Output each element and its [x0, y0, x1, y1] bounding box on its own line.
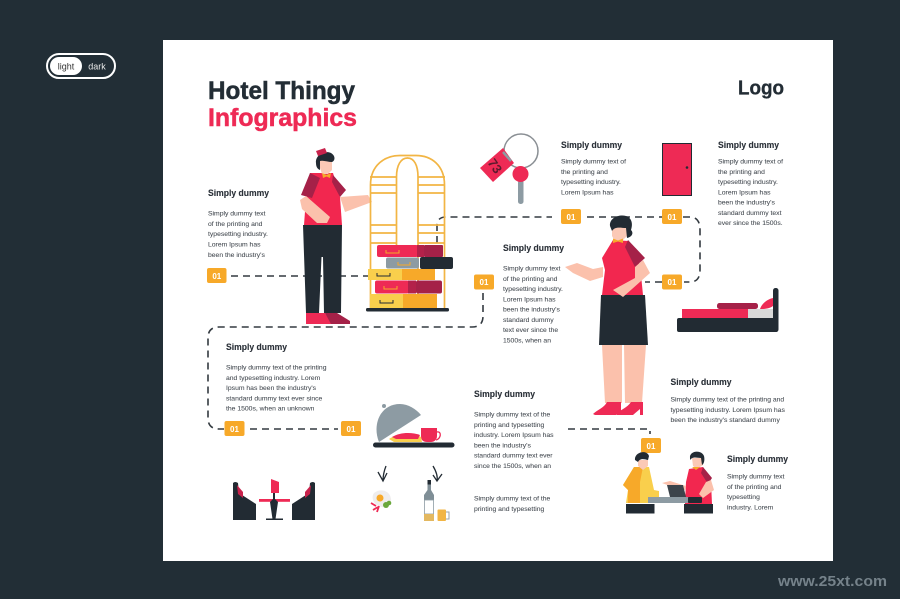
logo: Logo — [738, 78, 784, 100]
badge: bed — [662, 274, 682, 290]
text block: waitress — [503, 243, 565, 344]
badge: reception — [641, 438, 661, 453]
text block: restaurant: Simply dummy text of the printing — [226, 364, 327, 372]
text block: food service: printing and typesetting — [474, 422, 545, 429]
icon: bed — [677, 288, 778, 332]
folded arm — [300, 196, 330, 223]
guest body — [623, 467, 659, 503]
text block: waitress: 1500s, when an — [503, 338, 551, 344]
text block: key: the printing and — [561, 169, 608, 176]
text block: waitress: of the printing and — [503, 276, 558, 283]
bow tie — [613, 238, 623, 243]
dashed connector: reception — [568, 429, 650, 434]
text block: right middle: Simply dummy — [670, 377, 732, 388]
cart frame — [370, 156, 445, 308]
text block: bellboy: of the printing and — [208, 221, 263, 228]
text block: door: ever since the 1500s. — [718, 220, 783, 227]
text block: reception: typesetting — [727, 494, 760, 501]
badge: bellboy — [207, 268, 226, 283]
text block: waitress: text ever since the — [503, 327, 558, 334]
illustration: luggage cart — [366, 156, 453, 312]
text block: door: Simply dummy text of — [718, 158, 783, 166]
text block: food service: printing and typesetting — [474, 506, 545, 513]
theme toggle: dark — [88, 62, 106, 72]
text block: bellboy: typesetting industry. — [208, 231, 268, 238]
sleeve — [625, 240, 645, 267]
badge: restaurant right — [341, 421, 361, 436]
theme toggle: light — [58, 62, 75, 72]
text block: reception: industry. Lorem — [727, 504, 774, 512]
text block: waitress: Lorem Ipsum has — [503, 296, 556, 304]
title: Hotel Thingy — [208, 77, 355, 105]
text block: waitress: standard dummy — [503, 317, 554, 324]
badge: restaurant left: 01 — [230, 425, 239, 434]
text block: right middle — [670, 377, 785, 424]
shirt — [304, 173, 342, 225]
face — [612, 224, 627, 241]
hair — [316, 152, 334, 170]
arrow: to food — [378, 466, 387, 481]
badge: restaurant right: 01 — [347, 425, 356, 434]
text block: reception: Simply dummy text — [727, 474, 785, 480]
hair — [610, 215, 632, 238]
text block: door: been the industry's — [718, 200, 775, 206]
icon: serving tray with cloche — [373, 404, 454, 448]
forearm — [613, 260, 650, 297]
dashed connector: top route — [437, 217, 700, 282]
badge: door: 01 — [668, 213, 677, 222]
text block: waitress: Simply dummy — [503, 243, 565, 254]
pointing arm — [565, 263, 603, 281]
arrow: to drinks — [433, 466, 442, 481]
text block: bellboy — [208, 188, 270, 259]
text block: key — [561, 140, 626, 196]
text block: food service: Simply dummy text of the — [474, 412, 551, 418]
sleeves — [301, 173, 346, 198]
face — [320, 160, 332, 174]
text block: food service: standard dummy text ever — [474, 452, 553, 460]
text block: door: standard dummy text — [718, 210, 782, 217]
badge: bellboy: 01 — [212, 272, 222, 281]
text block: food service: Simply dummy — [474, 389, 536, 400]
text block: food service: been the industry's — [474, 442, 531, 450]
text block: key: Lorem Ipsum has — [561, 190, 614, 196]
text block: reception — [727, 454, 789, 512]
text block: right middle: Simply dummy text of the printing and — [670, 396, 784, 404]
badge: waitress: 01 — [480, 278, 489, 287]
text block: restaurant: standard dummy text ever since — [226, 396, 323, 402]
text block: key: Simply dummy — [561, 140, 623, 151]
badge: bed: 01 — [668, 278, 677, 287]
text block: door: Lorem Ipsum has — [718, 190, 771, 196]
watermark: www.25xt.com — [777, 574, 887, 590]
title: Infographics — [208, 104, 357, 132]
bow tie — [322, 173, 331, 178]
right arm — [340, 195, 372, 212]
text block: waitress: Simply dummy text — [503, 266, 561, 272]
badge: door — [662, 209, 682, 224]
luggage stack — [377, 245, 418, 257]
text block: bellboy: Simply dummy — [208, 188, 270, 199]
text block: door: typesetting industry. — [718, 179, 778, 186]
badge: restaurant left — [224, 421, 244, 436]
text block: waitress: been the industry's — [503, 306, 560, 314]
dashed connector: bellboy — [231, 275, 368, 277]
text block: restaurant: Simply dummy — [226, 342, 288, 353]
theme toggle — [47, 54, 115, 78]
text block: door: the printing and — [718, 169, 765, 176]
white card panel — [163, 40, 833, 561]
icon: key with tag — [480, 134, 538, 204]
counter — [648, 497, 688, 503]
text block: food service: industry. Lorem Ipsum has — [474, 432, 554, 439]
illustration: bellboy — [300, 148, 372, 324]
shoes — [306, 313, 331, 324]
illustration: reception desk — [623, 452, 714, 514]
text block: reception: of the printing and — [727, 484, 782, 491]
text block: bellboy: Lorem Ipsum has — [208, 242, 261, 248]
receptionist body — [685, 467, 712, 504]
title — [208, 77, 357, 132]
skirt — [599, 295, 648, 345]
text block: key: Simply dummy text of — [561, 158, 626, 166]
text block: right middle: been the industry's standard dummy — [670, 417, 780, 424]
text block: food service: since the 1500s, when an — [474, 463, 551, 470]
blouse — [602, 240, 643, 295]
illustration: waitress — [565, 215, 650, 415]
badge: waitress — [474, 274, 494, 290]
text block: key: typesetting industry. — [561, 179, 621, 186]
text block: restaurant: the 1500s, when an unknown — [226, 406, 315, 412]
text block: restaurant: and typesetting industry. Lorem — [226, 375, 321, 382]
laptop — [667, 485, 686, 497]
badge: reception: 01 — [647, 442, 656, 451]
shoes — [593, 402, 643, 415]
badge: key: 01 — [567, 213, 576, 222]
icon: fried egg plate — [371, 490, 391, 512]
text block: restaurant: Ipsum has been the industry's — [226, 385, 317, 392]
text block: door: Simply dummy — [718, 140, 780, 151]
text block: bellboy: been the industry's — [208, 252, 265, 259]
icon: table with chairs — [233, 479, 315, 520]
text block: bellboy: Simply dummy text — [208, 210, 266, 218]
icon: key with tag: 73 — [485, 156, 505, 176]
cap — [316, 148, 327, 156]
trousers — [303, 225, 342, 313]
dashed connector: left route — [208, 293, 483, 429]
luggage handles — [384, 250, 410, 289]
text block: restaurant — [226, 342, 327, 412]
badge: key — [561, 209, 581, 224]
legs — [602, 345, 646, 403]
cart base — [366, 308, 449, 312]
text block: right middle: typesetting industry. Lorem Ipsum has — [670, 407, 785, 414]
text block: door — [718, 140, 783, 227]
icon: bottle and beer mug — [424, 480, 449, 521]
icon: door — [662, 143, 692, 196]
text block: food service: Simply dummy text of the — [474, 496, 551, 502]
text block: waitress: typesetting industry. — [503, 286, 563, 293]
text block: reception: Simply dummy — [727, 454, 789, 465]
text block: food service — [474, 389, 554, 513]
